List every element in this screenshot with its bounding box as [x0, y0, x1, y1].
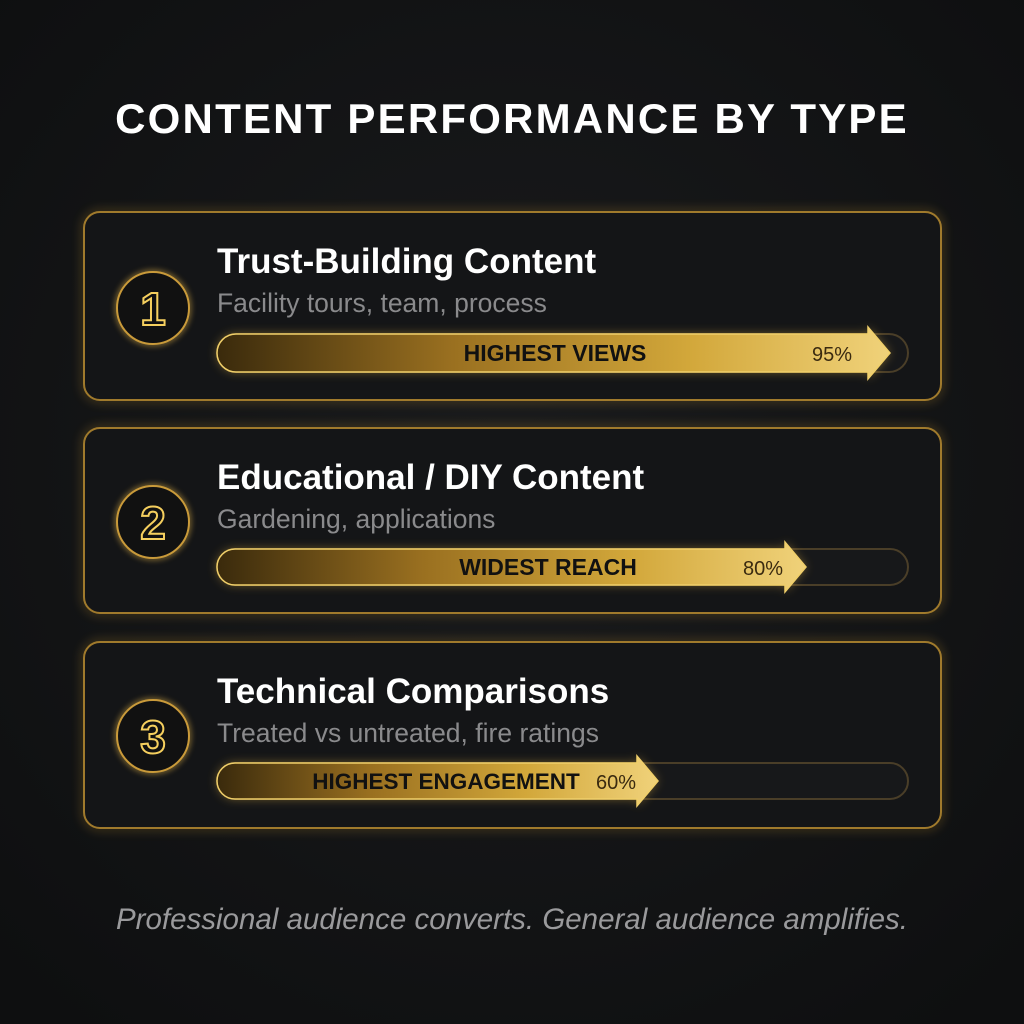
bar chart: 95%: HIGHEST VIEWS: [464, 340, 646, 366]
heading: Trust-Building Content: [217, 242, 596, 281]
icon: number 2: 2: [140, 497, 166, 549]
icon: number 3: 3: [140, 711, 166, 763]
bar chart: 60%: 60%: [596, 772, 636, 794]
panel: trust-building: [84, 212, 941, 400]
title: CONTENT PERFORMANCE BY TYPE: [115, 95, 909, 142]
icon: number 2: [117, 486, 189, 558]
heading: Technical Comparisons: [217, 672, 609, 711]
bar chart: 60%: HIGHEST ENGAGEMENT: [312, 769, 580, 794]
bar chart: 95%: [217, 327, 908, 379]
footer caption: Professional audience converts. General audience amplifies.: [116, 903, 908, 936]
bar chart: 60%: [217, 756, 908, 806]
bar chart: 95%: 95%: [812, 344, 852, 366]
panel: educational: [84, 428, 941, 613]
icon: number 1: 1: [140, 283, 166, 335]
panel: technical: [84, 642, 941, 828]
text block: Treated vs untreated, fire ratings: [217, 718, 599, 748]
heading: Educational / DIY Content: [217, 458, 645, 497]
bar chart: 80%: 80%: [743, 558, 783, 580]
bar chart: 80%: WIDEST REACH: [459, 554, 637, 580]
icon: number 1: [117, 272, 189, 344]
icon: number 3: [117, 700, 189, 772]
bar chart: 80%: [217, 542, 908, 592]
text block: Facility tours, team, process: [217, 288, 547, 318]
text block: Gardening, applications: [217, 504, 495, 534]
